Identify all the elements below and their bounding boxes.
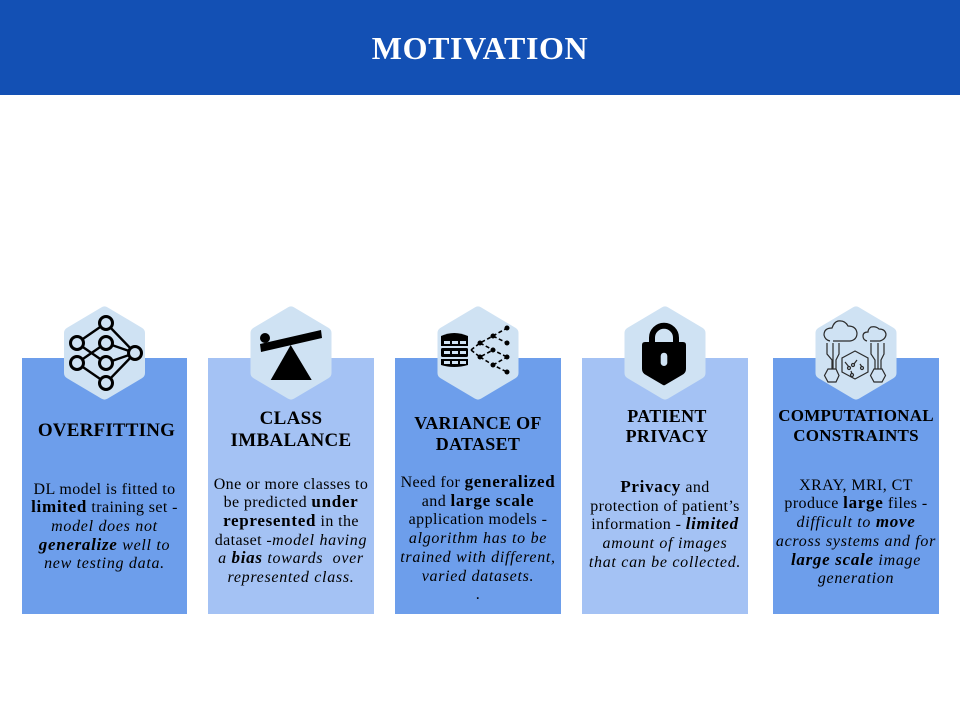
text: class imbalance: dataset -model having	[215, 532, 367, 549]
text: patient privacy: Privacy and	[620, 477, 710, 496]
text: computational constraints: XRAY, MRI, CT	[799, 477, 913, 494]
text: variance of dataset: algorithm has to be	[409, 530, 547, 547]
text: computational constraints: generation	[818, 570, 894, 587]
text: class imbalance: One or more classes to	[214, 476, 368, 492]
text: patient privacy: that can be collected.	[589, 554, 741, 571]
text: computational constraints: difficult to move	[797, 512, 915, 531]
panel: class imbalance	[208, 358, 374, 614]
heading: patient privacy	[626, 406, 708, 446]
icon: balance scale	[256, 312, 326, 394]
text: overfitting	[31, 480, 178, 572]
text: overfitting: DL model is fitted to	[33, 480, 176, 498]
heading: patient privacy: PRIVACY	[626, 426, 708, 446]
heading: class imbalance: IMBALANCE	[231, 430, 351, 451]
text: variance of dataset: Need for generalized	[401, 472, 555, 491]
text: patient privacy: protection of patient’s	[590, 498, 740, 515]
text: class imbalance	[214, 476, 368, 586]
text: class imbalance: represented in the	[223, 511, 359, 530]
text: variance of dataset	[400, 472, 556, 603]
text: class imbalance: a bias towards over	[218, 548, 364, 567]
heading: patient privacy: PATIENT	[627, 406, 707, 426]
heading: variance of dataset	[414, 413, 542, 454]
panel: variance of dataset	[395, 358, 561, 614]
text: patient privacy: amount of images	[602, 535, 727, 552]
heading: class imbalance: CLASS	[260, 408, 322, 429]
icon: neural network	[70, 312, 142, 394]
text: computational constraints	[776, 477, 936, 587]
text: patient privacy	[589, 477, 741, 571]
text: computational constraints: large scale image	[791, 550, 921, 568]
heading: computational constraints: CONSTRAINTS	[793, 426, 919, 445]
text: overfitting: new testing data.	[44, 555, 165, 572]
icon: dataset tree	[441, 312, 512, 394]
icon: padlock	[630, 312, 700, 394]
text: computational constraints: produce large files -	[784, 493, 928, 512]
text: variance of dataset: trained with different,	[400, 549, 556, 566]
heading: variance of dataset: VARIANCE OF	[414, 413, 542, 433]
heading: overfitting: OVERFITTING	[38, 420, 175, 441]
text: variance of dataset: .	[476, 586, 480, 603]
panel: overfitting	[22, 358, 187, 614]
text: variance of dataset: and large scale	[422, 491, 534, 510]
heading: variance of dataset: DATASET	[436, 434, 520, 454]
text: computational constraints: across systems and for	[776, 533, 936, 550]
title: MOTIVATION	[372, 30, 588, 66]
text: patient privacy: information - limited	[591, 514, 739, 533]
text: overfitting: limited training set -	[31, 497, 178, 516]
icon: cloud circuits	[822, 312, 890, 394]
text: class imbalance: be predicted under	[224, 492, 358, 511]
panel: patient privacy	[582, 358, 748, 614]
heading: class imbalance	[231, 408, 351, 451]
heading: computational constraints	[778, 406, 934, 445]
panel: computational constraints	[773, 358, 939, 614]
text: class imbalance: represented class.	[228, 569, 354, 586]
header banner	[0, 0, 960, 95]
text: variance of dataset: application models -	[409, 511, 547, 528]
heading: computational constraints: COMPUTATIONAL	[778, 406, 934, 425]
text: overfitting: model does not	[51, 518, 158, 535]
text: variance of dataset: varied datasets.	[422, 568, 534, 585]
text: overfitting: generalize well to	[39, 535, 170, 554]
